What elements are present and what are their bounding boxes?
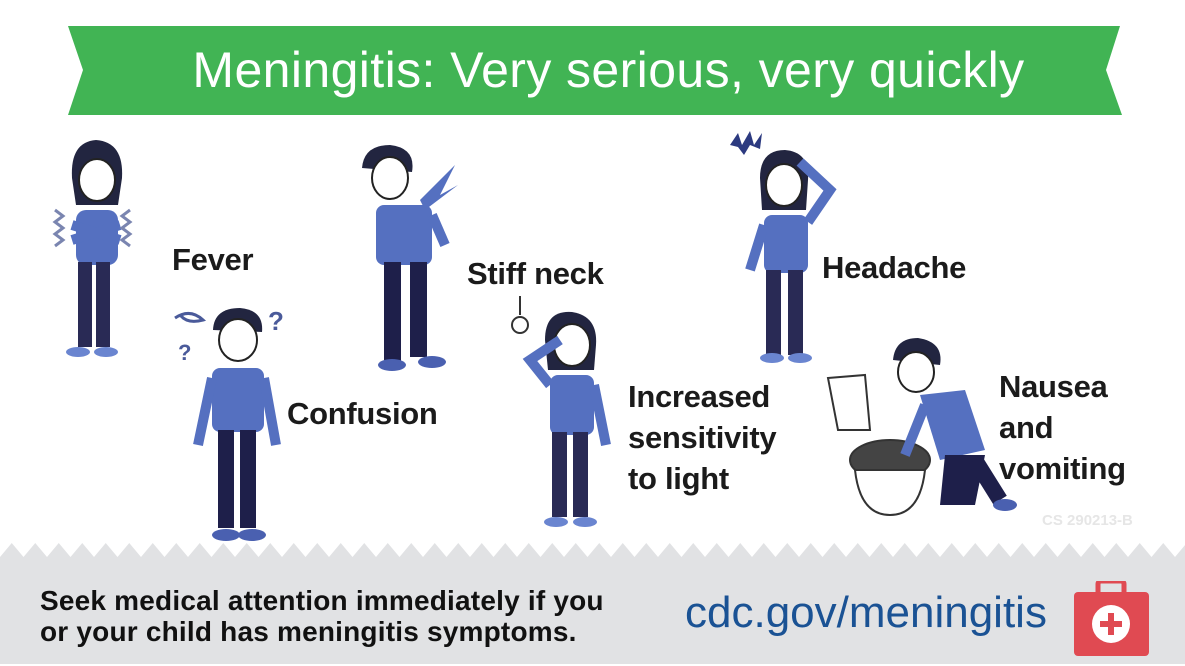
title banner bbox=[68, 26, 1122, 115]
code: CS 290213-B: CS 290213-B bbox=[1042, 512, 1133, 529]
label: stiff neck: Stiff neck bbox=[467, 256, 604, 291]
label: headache: Headache bbox=[822, 250, 966, 285]
label: increased sensitivity to light: sensitivity bbox=[628, 420, 776, 455]
label: increased sensitivity to light: to light bbox=[628, 461, 729, 496]
icon: first aid kit bbox=[1074, 581, 1149, 656]
label: nausea and vomiting: and bbox=[999, 410, 1053, 445]
label: fever: Fever bbox=[172, 242, 253, 277]
figure: fever woman bbox=[55, 140, 130, 357]
figure: headache woman bbox=[730, 131, 830, 363]
url: cdc.gov/meningitis bbox=[685, 588, 1047, 637]
footer message bbox=[40, 585, 604, 647]
figure: light sensitivity woman bbox=[512, 296, 606, 527]
figure: confusion man bbox=[175, 306, 284, 541]
label: nausea and vomiting: Nausea bbox=[999, 369, 1108, 404]
label: nausea and vomiting: vomiting bbox=[999, 451, 1126, 486]
figure: stiff neck man bbox=[362, 145, 458, 371]
label: increased sensitivity to light bbox=[628, 379, 776, 496]
figure: confusion man: ? bbox=[178, 340, 191, 365]
figure: nausea man with toilet bbox=[828, 338, 1017, 515]
label: nausea and vomiting bbox=[999, 369, 1126, 486]
footer message: or your child has meningitis symptoms. bbox=[40, 616, 577, 647]
footer message: Seek medical attention immediately if you bbox=[40, 585, 604, 616]
footer band bbox=[0, 543, 1185, 664]
label: confusion: Confusion bbox=[287, 396, 438, 431]
figure: confusion man: ? bbox=[268, 306, 284, 336]
title: Meningitis: Very serious, very quickly bbox=[192, 42, 1025, 98]
label: increased sensitivity to light: Increased bbox=[628, 379, 770, 414]
